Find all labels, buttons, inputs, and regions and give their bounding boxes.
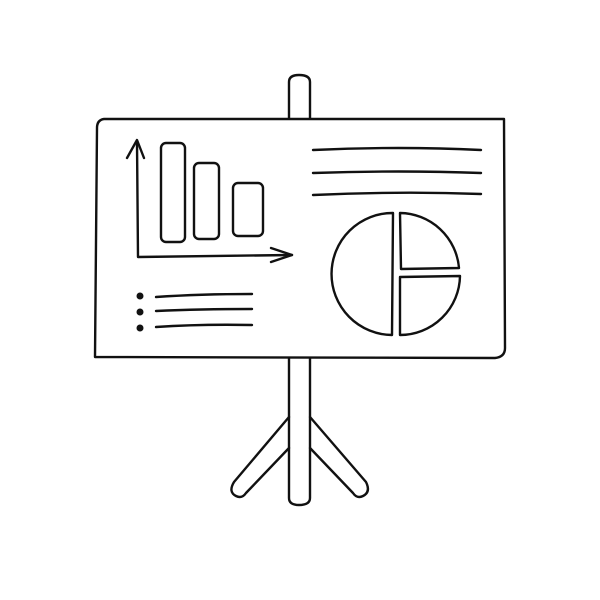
easel lower post and legs (231, 358, 368, 505)
bar chart (127, 140, 292, 262)
board (95, 119, 505, 358)
pie chart (332, 213, 460, 335)
easel top post (289, 75, 310, 118)
text lines right (313, 148, 481, 195)
bullet list (136, 292, 252, 332)
